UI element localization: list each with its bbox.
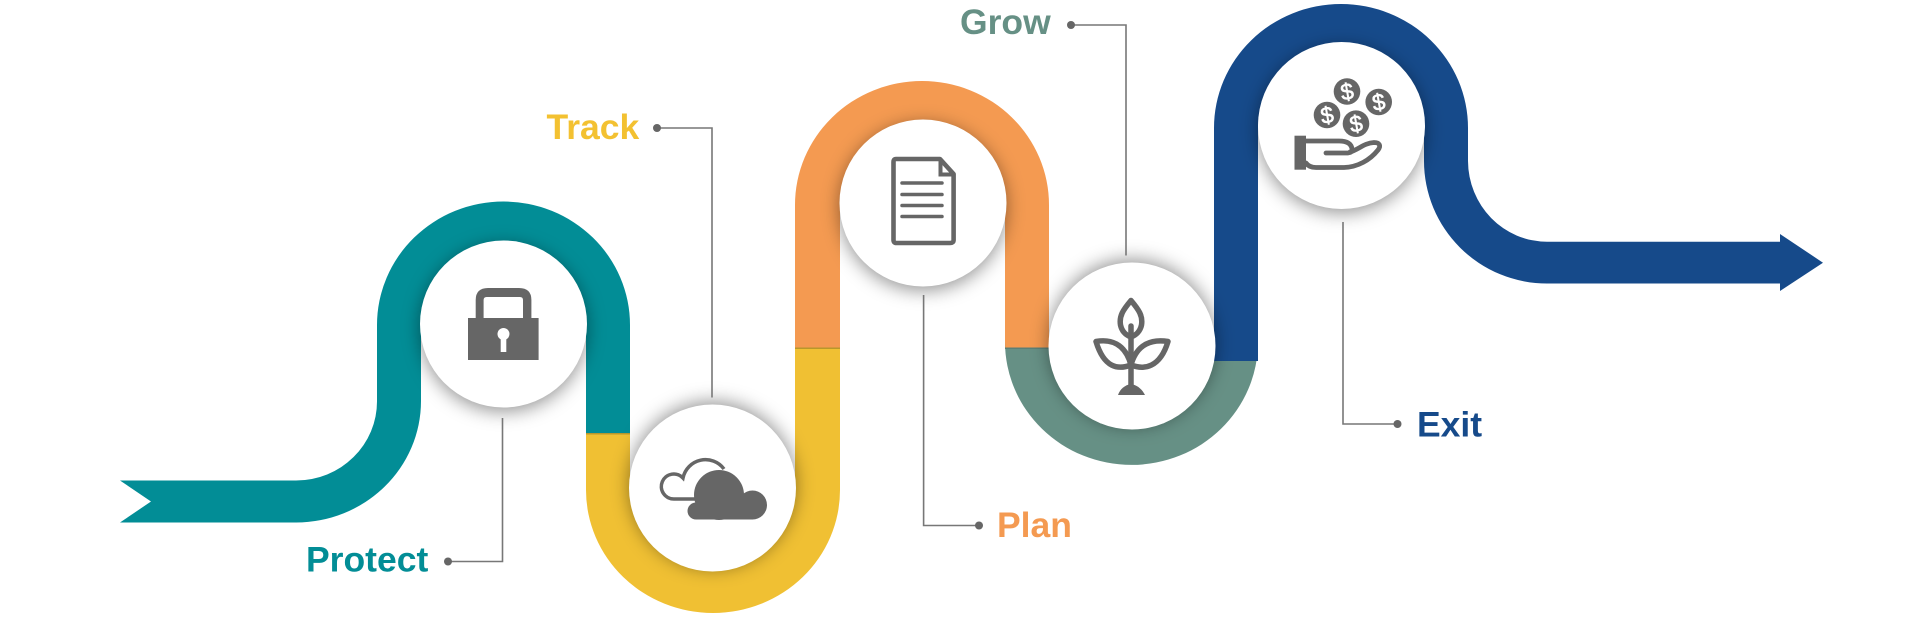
icon: document [894,159,954,243]
road segment: green [1005,342,1258,465]
step: Track [546,107,796,572]
road segment: yellow [586,348,840,613]
label: Protect: Protect [306,540,428,580]
step: Grow [960,2,1216,430]
connector: Exit [1343,222,1398,424]
label: Track: Track [546,107,640,147]
icon: clouds [661,460,767,520]
label: Exit: Exit [1417,404,1482,444]
label: Plan: Plan [997,505,1072,545]
icon: plant [1096,300,1168,395]
road segment: teal [120,202,630,522]
label: Grow: Grow [960,2,1051,42]
step: Protect [306,240,587,580]
icon: hand with coins: $ [1370,88,1387,116]
step: Exit [1258,42,1482,444]
road segment: orange [795,81,1049,348]
icon: padlock [468,288,539,360]
step: Plan [840,120,1072,545]
icon: hand with coins: $ [1318,101,1336,129]
connector: Protect [448,418,502,562]
road segment: blue with arrowhead [1214,4,1823,361]
connector: Track [657,128,712,398]
icon: hand with coins [1294,78,1392,170]
icon: hand with coins: $ [1338,78,1356,105]
connector: Grow [1071,25,1126,256]
connector: Plan [924,295,979,526]
icon: hand with coins: $ [1347,110,1365,138]
